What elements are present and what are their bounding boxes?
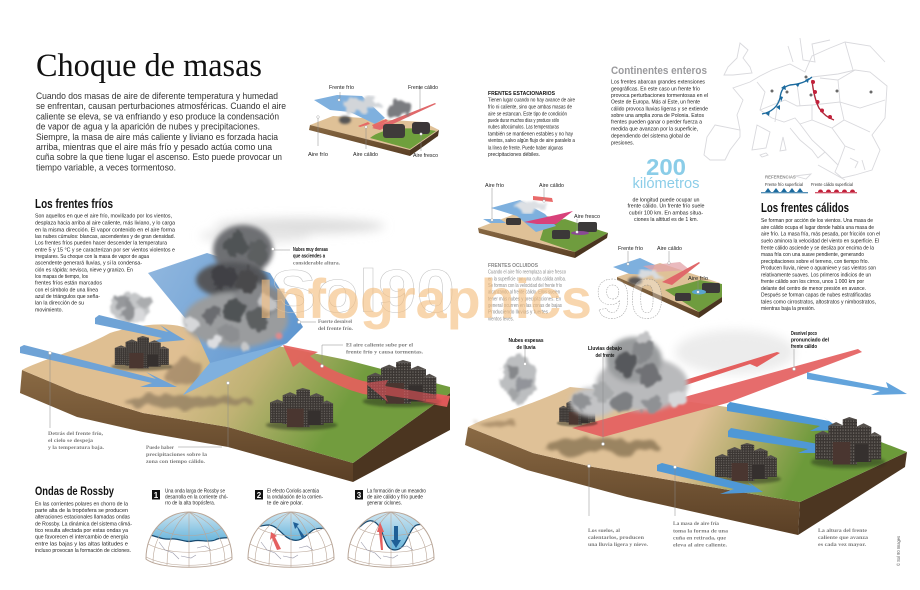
diagram: occluded front block: Frente frío [618,246,643,252]
rossby step 1: rro de la alta tropósfera. [165,501,215,507]
map legend: Frente frío superficial [765,182,803,187]
front blue arrow [20,345,177,387]
cirrus clouds [675,330,795,374]
text: frentes estacionarios: vientos, salvo algún flujo de aire paralelo a [488,138,576,144]
city: rear [111,336,172,371]
high cirrus clouds [200,218,385,243]
map legend [761,174,857,193]
diagram: stationary front block [478,183,608,258]
callouts: warm front: Desnivel poco [791,331,817,337]
leader lines [50,250,343,447]
rossby step 3: de aire cálido y frío puede [367,495,423,501]
rossby step 3: generar ciclones. [367,501,402,507]
cold air wall [148,253,303,395]
intro text block: caliente se eleva, se va enfriando y eso produce la condensación [36,110,279,121]
callouts: warm front: frente cálido [791,344,818,350]
text: los frentes cálidos: frente cálido son los cirros, unos 1 000 km por [761,279,864,285]
text: continentes enteros: frentes pueden ganar o perder fuerza a [611,120,703,126]
text: frentes estacionarios: también se mantienen estables y no hay [488,131,573,137]
diagram: warm front block [465,330,907,535]
text: frentes ocluidos: tener más nubes y precipitaciones. En [488,296,561,302]
text: frentes estacionarios: Tienen lugar cuando no hay avance de aire [488,98,575,104]
intro text block: arriba, mientras que el aire más frío y pesado actúa como una [36,141,273,152]
text: los frentes fríos: irregulares. Su choque con la masa de vapor de agua [35,254,150,260]
diagram: fronts overview block: Aire frío [308,152,328,158]
text: ondas de rossby: incluso provocan la formación de ciclones. [35,548,131,554]
text: los frentes cálidos: Producen lluvia, nieve o aguanieve y sus vientos son [761,266,876,272]
red warm air arrow [283,345,450,407]
callouts: cold front [48,247,424,465]
text: los frentes fríos: lan la dirección de su [35,301,84,307]
text: frentes ocluidos [488,263,566,323]
text: los frentes fríos: en la misma dirección. El vapor contenido en el aire forma [35,227,176,233]
diagram: fronts overview block: Frente frío [329,85,354,91]
text: frentes ocluidos: general ocurren en las zonas de bajas [488,303,562,309]
rossby step 3 [346,489,436,567]
diagram: stationary front block: Aire fresco [574,214,600,220]
text: frentes ocluidos: alcanzando al frente cálido. Ellos suelen [488,290,560,296]
callouts: warm front: La masa de aire fría [673,521,719,527]
text: continentes enteros: Continentes enteros [611,65,707,77]
callouts: warm front: Lluvias debajo [588,346,623,352]
rossby step 1: Una onda larga de Rossby se [165,489,225,495]
small rain cloud [501,355,537,401]
text: ondas de rossby: En las corrientes polares en chorro de la [35,501,129,507]
callouts: warm front: pronunciado del [791,338,829,344]
rossby step 2: El efecto Coriolis acentúa [267,489,320,495]
text: frentes estacionarios: nubes altocúmulos. Las temperaturas [488,125,559,131]
text: los frentes cálidos: precipitaciones sobre el terreno, con tiempo frío. [761,259,869,265]
callouts: warm front: toma la forma de una [673,528,728,534]
text: continentes enteros: provoca perturbaciones tormentosas en el [611,93,708,99]
callouts: cold front: Puede haber [146,445,175,451]
text: ondas de rossby: parte alta de la tropósfera se producen [35,508,128,514]
text: frentes ocluidos: vientos leves. [488,317,514,323]
watermark: Infographics [258,267,592,330]
text: los frentes fríos: frentes fríos están marcados [35,281,102,287]
text: frentes ocluidos: Cuando el aire frío reemplaza al aire fresco [488,270,566,276]
callouts: warm front: Los suelos, al [588,528,621,534]
text: los frentes fríos: los mapas de tiempo, los [35,274,88,280]
front blue arrow [657,463,763,494]
cities [711,443,781,484]
stat: 200 kilómetros: ciones la altitud es de 1 km. [634,217,698,223]
text: los frentes fríos: ción es rápida: nevisca, nieve y granizo. En [35,267,133,273]
leader lines [525,349,794,516]
diagram: fronts overview block [308,85,439,159]
text: continentes enteros: dependiendo del sistema global de [611,133,690,139]
rear blue arrow [95,315,185,343]
large cloud [570,332,688,417]
text: los frentes fríos: ascendente generará lluvias, y si la condensa- [35,261,142,267]
text: ondas de rossby: alteraciones estacionales llamadas ondas [35,515,130,521]
text: frentes estacionarios: FRENTES ESTACIONARIOS [488,91,555,97]
callouts: cold front: considerable altura. [293,260,341,266]
text: los frentes cálidos: Después se forman capas de nubes estratificadas [761,293,871,299]
diagram: fronts overview block: Aire fresco [413,153,438,159]
callouts: cold front: zona con tiempo cálido. [146,459,206,465]
callouts: warm front: caliente que avanza [818,535,868,541]
intro text block: de vapor de agua y la aparición de nubes y precipitaciones. [36,121,260,132]
text: los frentes cálidos: aire cálido ocupa el lugar donde había una masa de [761,225,874,231]
text: frentes estacionarios: aire se estancan. Este tipo de condición [488,111,567,117]
stat: 200 kilómetros: 200 [646,154,686,180]
text: frentes estacionarios: precipitaciones débiles. [488,152,540,158]
blue cold air arrows [727,372,907,453]
text: frentes estacionarios [488,91,576,158]
text: ondas de rossby: tico resulta afectada por estas ondas ya [35,528,129,534]
dense storm cloud [184,225,288,353]
red upper arrow [675,352,780,388]
stat: 200 kilómetros: cubrir 100 km. En ambas situa- [629,210,703,216]
callouts: warm front [508,331,868,548]
text: frentes estacionarios: la línea de frente. Puede haber algunas [488,145,563,151]
intro text block: cuña sobre la que tiene lugar el ascenso. Esto puede provocar un [36,151,282,162]
intro text block: Cuando dos masas de aire de diferente temperatura y humedad [36,90,278,101]
text: continentes enteros [611,65,708,146]
callouts: cold front: El aire caliente sube por el [346,342,414,348]
text: frentes ocluidos: Se forman con la velocidad del frente frío [488,283,562,289]
rossby step 3: 3 [357,491,362,500]
callouts: warm front: La altura del frente [818,528,868,534]
text: continentes enteros: Oeste de Europa. Más al Este, un frente [611,100,700,106]
cities: front [266,388,337,430]
text: los frentes fríos: las nubes cúmulos: blancas, ascendentes y de gran densidad. [35,234,175,240]
heading: ondas de rossby: Ondas de Rossby [35,484,114,498]
stat: 200 kilómetros: kilómetros [632,175,700,192]
text: continentes enteros: geográficas. En este caso un frente frío [611,86,700,92]
map legend: Frente cálido superficial [811,182,853,187]
heading: los frentes fríos: Los frentes fríos [35,196,113,211]
callouts: warm front: de lluvia [516,345,536,351]
text: los frentes cálidos: mientras baja la presión. [761,306,815,312]
text: los frentes cálidos: delante del centro de menor presión en avance. [761,286,866,292]
text: los frentes fríos [35,214,176,313]
diagram: stationary front block: Aire cálido [539,183,564,189]
callouts: warm front: cuña en retirada, que [673,536,727,542]
diagram: occluded front block [613,246,722,318]
text: continentes enteros: cálido provoca lluvias ligeras y se extiende [611,106,708,112]
callouts: cold front: que asciendes a [293,254,326,260]
callouts: cold front: y la temperatura baja. [48,445,105,451]
warm front line [811,80,834,120]
callouts: warm front: Nubes espesas [508,338,544,344]
callouts: cold front: Nubes muy densas [293,247,328,253]
text: los frentes cálidos: tales como cirrostratos, altostratos y nimbostratos, [761,299,876,305]
text: frentes ocluidos: Produciendo lluvias y fuertes [488,310,548,316]
text: continentes enteros: presiones. [611,140,634,146]
rossby step 2: te de aire polar. [267,501,303,507]
intro text block: se enfrentan, causan perturbaciones atmosféricas. Cuando el aire [36,100,286,111]
text: frentes ocluidos: en la superficie con una cuña cálida arriba. [488,276,566,282]
cold front line [762,77,812,116]
callouts: cold front: Fuerte desnivel [318,319,353,325]
rossby step 1 [144,489,234,567]
text: los frentes cálidos: suelo aminora la velocidad del viento en superficie. El [761,239,879,245]
rossby step 2: 2 [257,491,262,500]
diagram: cold front block [20,218,450,482]
rossby step 1: desarrolla en la corriente chó- [165,495,228,501]
callouts: cold front: frente frío y causa tormentas. [346,350,424,356]
intro text block: Siempre, la masa de aire más caliente y liviano es forzada hacia [36,131,279,142]
diagram: occluded front block: Aire frío [688,276,708,282]
terrain block [20,324,450,482]
diagram: stationary front block: Aire frío [485,183,504,189]
text: ondas de rossby: de Rossby. La dinámica del sistema climá- [35,521,132,527]
stat: 200 kilómetros [628,154,704,223]
watermark: 90 [596,267,664,330]
callouts: cold front: precipitaciones sobre la [146,452,207,458]
text: los frentes fríos: Los frentes fríos pueden hacer descender la temperatura [35,241,168,247]
callouts: cold front: del frente frío. [318,326,354,332]
watermark: Sol90 [270,258,455,325]
text: los frentes fríos: entre 5 y 15 °C y se caracterizan por ser vientos violentos e [35,247,175,253]
text: los frentes fríos: Son aquellos en que el aire frío, movilizado por los vientos, [35,214,172,220]
credit: © Sol 90 Images [895,535,901,566]
callouts: warm front: una lluvia ligera y nieve. [588,542,649,548]
rossby step 3: La formación de un meandro [367,489,426,495]
stat: 200 kilómetros: frente cálido. Un frente frío suele [628,204,704,210]
text: continentes enteros: sobre una amplia zona de Polonia. Estos [611,113,704,119]
title: Choque de masas [36,48,262,84]
text: los frentes fríos: desplaza hacia arriba al aire caliente, más liviano, y lo carga [35,220,176,226]
callouts: cold front: el cielo se despeja [48,438,93,444]
diagram: occluded front block: Aire cálido [657,246,682,252]
text: los frentes cálidos [761,218,880,312]
text: ondas de rossby [35,501,132,554]
city behind cloud [557,398,598,427]
callouts: warm front: es cada vez mayor. [818,542,867,548]
rossby step 2: la ondulación de la corrien- [267,495,323,501]
text: continentes enteros: medida que avanzan por la superficie, [611,127,698,133]
rossby step 2 [246,489,336,567]
map legend: REFERENCIAS [765,174,796,180]
red arrow over the city [365,380,450,405]
rossby step 1: 1 [154,491,159,500]
text: ondas de rossby: que favorecen el intercambio de energía [35,535,129,541]
text: frentes estacionarios: puede durar muchos días y produce sólo [488,118,559,124]
diagram: fronts overview block: Aire cálido [353,152,378,158]
map of Europe with fronts [704,38,887,180]
text: frentes ocluidos: FRENTES OCLUIDOS [488,263,538,269]
callouts: warm front: eleva al aire caliente. [673,542,728,548]
text: ondas de rossby: entre las bajas y las altas latitudes e [35,541,128,547]
intro text block [36,90,286,172]
text: los frentes cálidos: relativamente suaves. Los primeros indicios de un [761,272,871,278]
stat: 200 kilómetros: de longitud puede ocupar un [632,197,700,203]
text: los frentes cálidos: frente cálido asciende y se desliza por encima de la [761,245,875,251]
heading: los frentes cálidos: Los frentes cálidos [761,200,849,215]
terrain block [465,387,907,535]
diagram: fronts overview block: Frente cálido [408,85,438,91]
text: los frentes fríos: azul de triángulos que seña- [35,294,100,300]
small grey cloud [110,293,150,323]
red warm air sheet [572,349,862,437]
callouts: cold front: Detrás del frente frío, [48,431,104,437]
text: continentes enteros: Los frentes abarcan grandes extensiones [611,80,705,86]
text: los frentes fríos: movimiento. [35,307,63,313]
callouts: warm front: del frente [596,353,614,359]
text: los frentes fríos: con el símbolo de una línea [35,287,99,293]
text: los frentes cálidos: aire frío. La masa fría, más pesada, por fricción con el [761,232,880,238]
intro text block: tiempo variable, a veces tormentoso. [36,161,176,172]
callouts: warm front: calentarlos, producen [588,535,644,541]
text: frentes estacionarios: frío ni caliente, sino que ambas masas de [488,105,572,111]
text: los frentes cálidos: masa fría con una suave pendiente, generando [761,252,864,258]
text: los frentes cálidos: Se forman por acción de los vientos. Una masa de [761,218,873,224]
